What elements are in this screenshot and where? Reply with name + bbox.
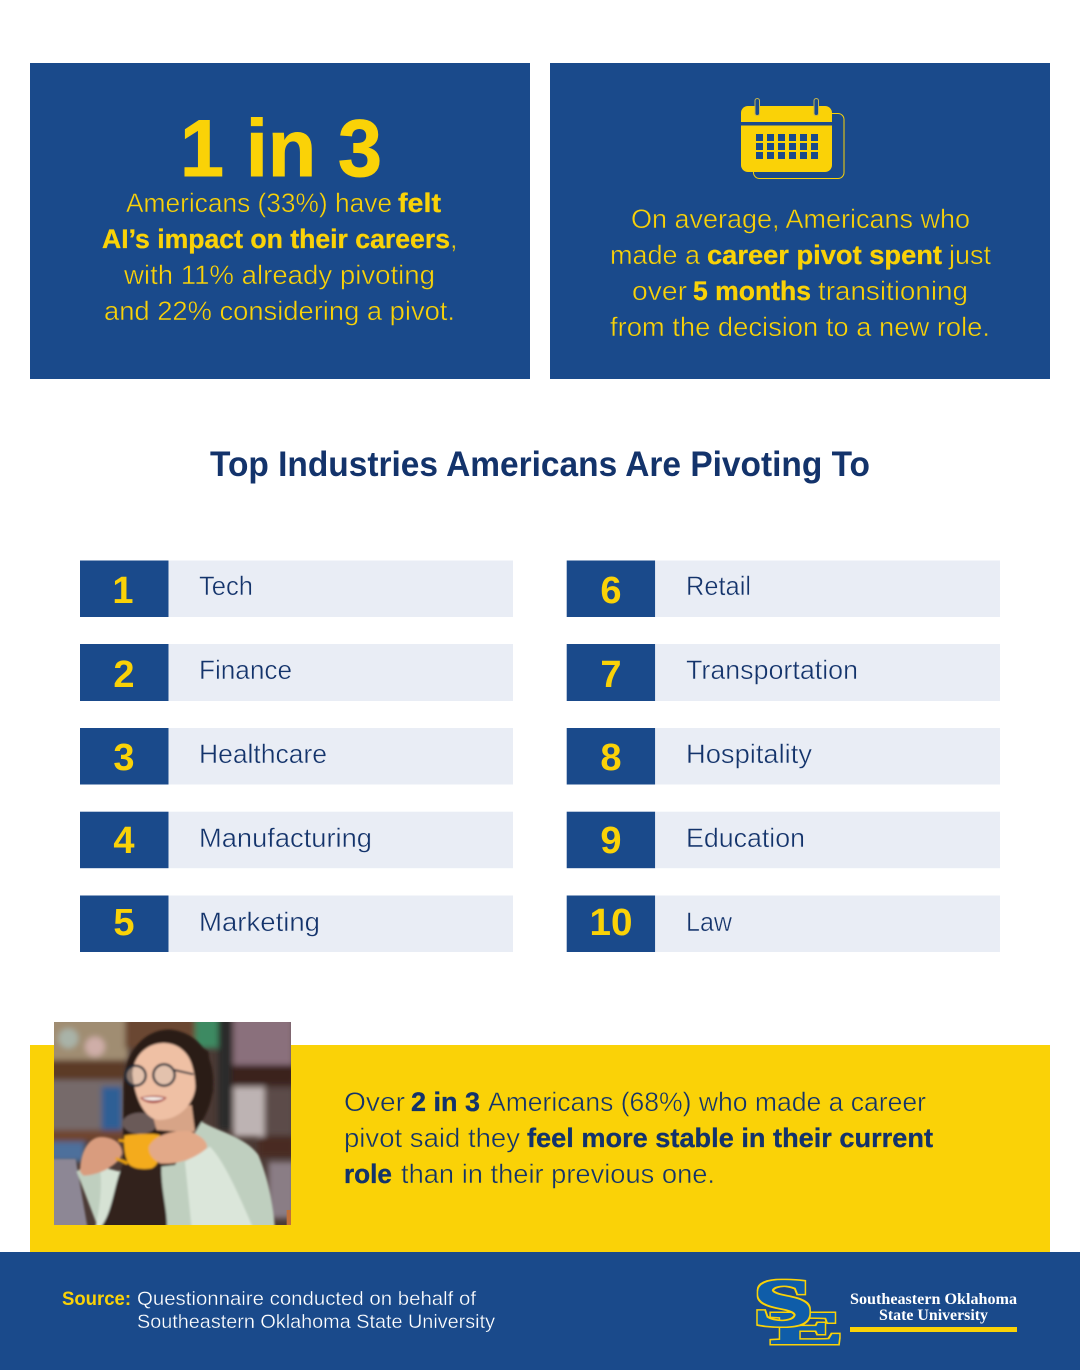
row: Retail: 6 — [600, 570, 622, 612]
source note: Questionnaire conducted on behalf of — [137, 1289, 477, 1310]
row: Tech: Tech — [199, 571, 253, 601]
row: Retail: Retail — [686, 571, 751, 601]
row: Manufacturing — [80, 812, 513, 868]
stat description: , — [450, 224, 458, 254]
source note: Source: — [62, 1289, 131, 1310]
row: Law: 10 — [590, 902, 632, 944]
row: Manufacturing: Manufacturing — [199, 823, 372, 853]
stat description: transitioning — [818, 276, 968, 306]
callout text: than in their previous one. — [401, 1159, 715, 1189]
stat description: AI’s impact on their careers — [102, 224, 450, 254]
callout text: 2 in 3 — [411, 1087, 480, 1117]
stat description: made a — [610, 240, 701, 270]
face — [132, 1043, 196, 1120]
stat description: career pivot spent — [707, 240, 942, 270]
laptop — [52, 1159, 88, 1228]
neck — [152, 1105, 195, 1132]
row: Marketing: Marketing — [199, 907, 320, 937]
row: Hospitality — [567, 728, 1000, 784]
row: Law: Law — [686, 907, 732, 937]
sweater — [77, 1122, 275, 1228]
row: Finance — [80, 644, 513, 701]
logo: Southeastern Oklahoma State University: State University — [879, 1307, 988, 1324]
logo: Southeastern Oklahoma State University: E — [770, 1304, 844, 1353]
right hand — [149, 1131, 207, 1164]
row: Healthcare: Healthcare — [199, 739, 327, 769]
list: industries 6 to 10 — [567, 560, 1000, 952]
source note — [62, 1289, 496, 1333]
cup — [124, 1134, 161, 1169]
row: Healthcare — [80, 728, 513, 784]
smile — [140, 1096, 167, 1103]
row: Education: 9 — [600, 820, 622, 862]
row: Finance: 2 — [113, 654, 135, 696]
row: Marketing: 5 — [113, 902, 135, 944]
list: industries 1 to 5 — [80, 560, 513, 952]
glasses — [126, 1066, 146, 1086]
hair strand over sweater — [100, 1163, 167, 1228]
stat description: felt — [398, 188, 441, 218]
footer — [0, 1252, 1080, 1370]
logo: Southeastern Oklahoma State University: S — [753, 1267, 813, 1340]
stat description: with 11% already pivoting — [123, 260, 435, 290]
stat description: and 22% considering a pivot. — [104, 296, 455, 326]
row: Transportation: 7 — [600, 654, 622, 696]
row: Finance: Finance — [199, 655, 292, 685]
hair — [122, 1028, 214, 1174]
stat description: from the decision to a new role. — [610, 312, 990, 342]
panel: stability callout — [30, 1017, 1050, 1252]
logo: Southeastern Oklahoma State University — [753, 1267, 1017, 1353]
row: Manufacturing: 4 — [113, 820, 135, 862]
heading: top industries: Top Industries Americans Are Pivoting To — [210, 445, 870, 484]
source note: Southeastern Oklahoma State University — [137, 1312, 496, 1333]
row: Education: Education — [686, 823, 805, 853]
callout text: feel more stable in their current — [527, 1123, 933, 1153]
row: Marketing — [80, 896, 513, 952]
row: Hospitality: Hospitality — [686, 739, 813, 769]
row: Law — [567, 896, 1000, 952]
row: Tech: 1 — [112, 570, 134, 612]
stat description: just — [948, 240, 991, 270]
steam — [123, 1113, 157, 1134]
row: Transportation — [567, 644, 1000, 701]
callout text — [344, 1087, 933, 1189]
row: Healthcare: 3 — [113, 737, 135, 779]
row: Transportation: Transportation — [686, 655, 858, 685]
callout text: role — [344, 1159, 392, 1189]
row: Education — [567, 812, 1000, 868]
callout text: pivot said they — [344, 1123, 520, 1153]
row: Tech — [80, 560, 513, 617]
row: Hospitality: 8 — [600, 737, 622, 779]
stat description: 5 months — [693, 276, 811, 306]
callout text: Over — [344, 1087, 405, 1117]
panel: 5 months transition — [550, 63, 1050, 379]
photo: smiling woman holding a yellow cup — [48, 1017, 295, 1228]
row: Retail — [567, 560, 1000, 617]
stat description — [102, 188, 458, 326]
stat description: over — [632, 276, 687, 306]
logo: Southeastern Oklahoma State University: Southeastern Oklahoma — [850, 1291, 1017, 1308]
stat description — [610, 204, 991, 342]
icon: calendar — [741, 98, 844, 178]
big stat: 1 in 3: 1 in 3 — [180, 104, 382, 194]
stat description: On average, Americans who — [631, 204, 970, 234]
callout text: Americans (68%) who made a career — [488, 1087, 926, 1117]
left hand — [80, 1137, 122, 1176]
panel: 1 in 3 statistic — [30, 63, 530, 379]
stat description: Americans (33%) have — [126, 188, 392, 218]
